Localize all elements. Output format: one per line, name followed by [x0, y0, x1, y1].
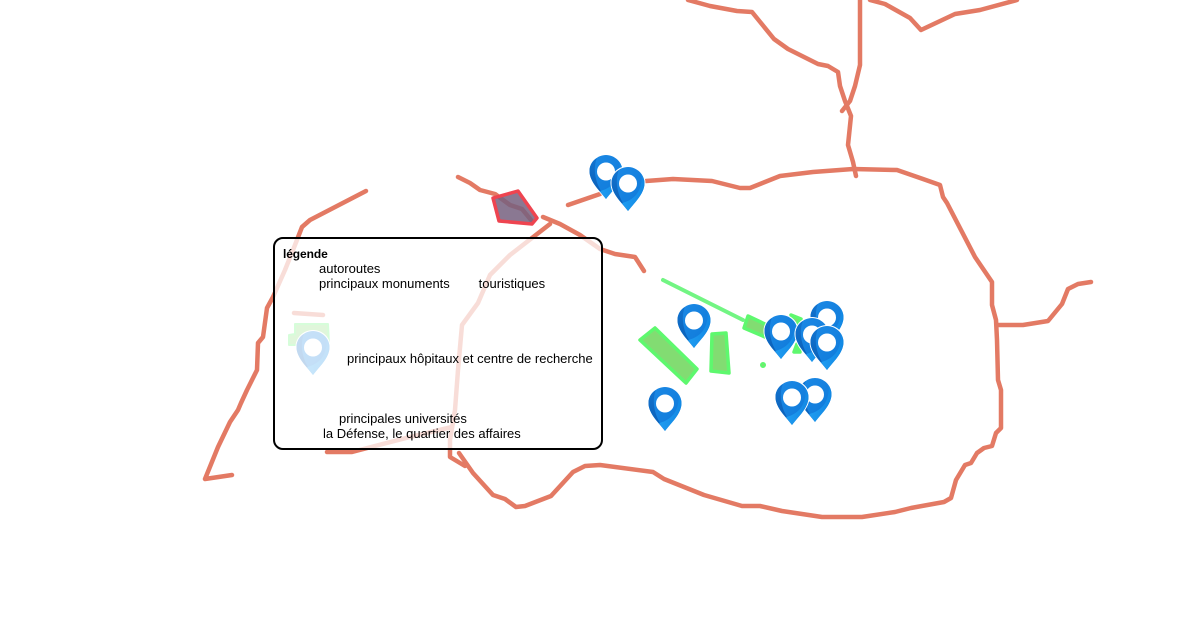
road: north segment to centre [543, 217, 644, 271]
roads [205, 0, 1091, 517]
road: far north-east [870, 0, 1017, 30]
road: north vertical [842, 0, 860, 111]
road: north-west segment [458, 177, 531, 220]
road: west motorway [205, 191, 366, 479]
green dot [761, 363, 765, 367]
road: ring north stub [568, 194, 600, 205]
road: ring south and east [459, 169, 1001, 517]
pins: tourist monuments [588, 154, 844, 432]
road: south-west spur [327, 427, 452, 452]
legend [273, 237, 603, 450]
pin 8 [810, 325, 844, 371]
legend: universities: principales universités [339, 411, 467, 426]
green block 1 [640, 328, 697, 383]
legend title: légende [283, 247, 328, 261]
pin 7 [794, 317, 830, 363]
hospitals and universities [640, 280, 801, 383]
green block 4 [791, 315, 801, 326]
road: east spur [997, 282, 1091, 325]
road: north-east long [688, 0, 856, 176]
legend: hospitals: principaux hôpitaux et centre de recherche [347, 351, 593, 366]
pin 5 [810, 300, 844, 346]
legend: monuments: principaux monuments touristiques [319, 276, 545, 291]
pin 4 [648, 386, 682, 432]
pin 10 [774, 380, 810, 426]
pin 9 [798, 377, 832, 423]
green block 3 [744, 316, 767, 337]
legend: la Défense: la Défense, le quartier des affaires [323, 426, 521, 441]
legend: motorways: autoroutes [319, 261, 380, 276]
pin 2 [610, 166, 646, 212]
swatch: pin [296, 330, 330, 376]
green block 2 [711, 333, 729, 373]
green line [663, 280, 743, 320]
pin 3 [676, 303, 712, 349]
swatch: motorway [294, 313, 323, 315]
road: ring [450, 224, 550, 466]
swatch: green area [289, 324, 329, 345]
pin 6 [764, 314, 798, 360]
green block 5 [794, 344, 800, 352]
legend swatches beneath the panel [289, 313, 330, 376]
pin 1 [588, 154, 624, 200]
monument: la Défense [493, 191, 537, 224]
